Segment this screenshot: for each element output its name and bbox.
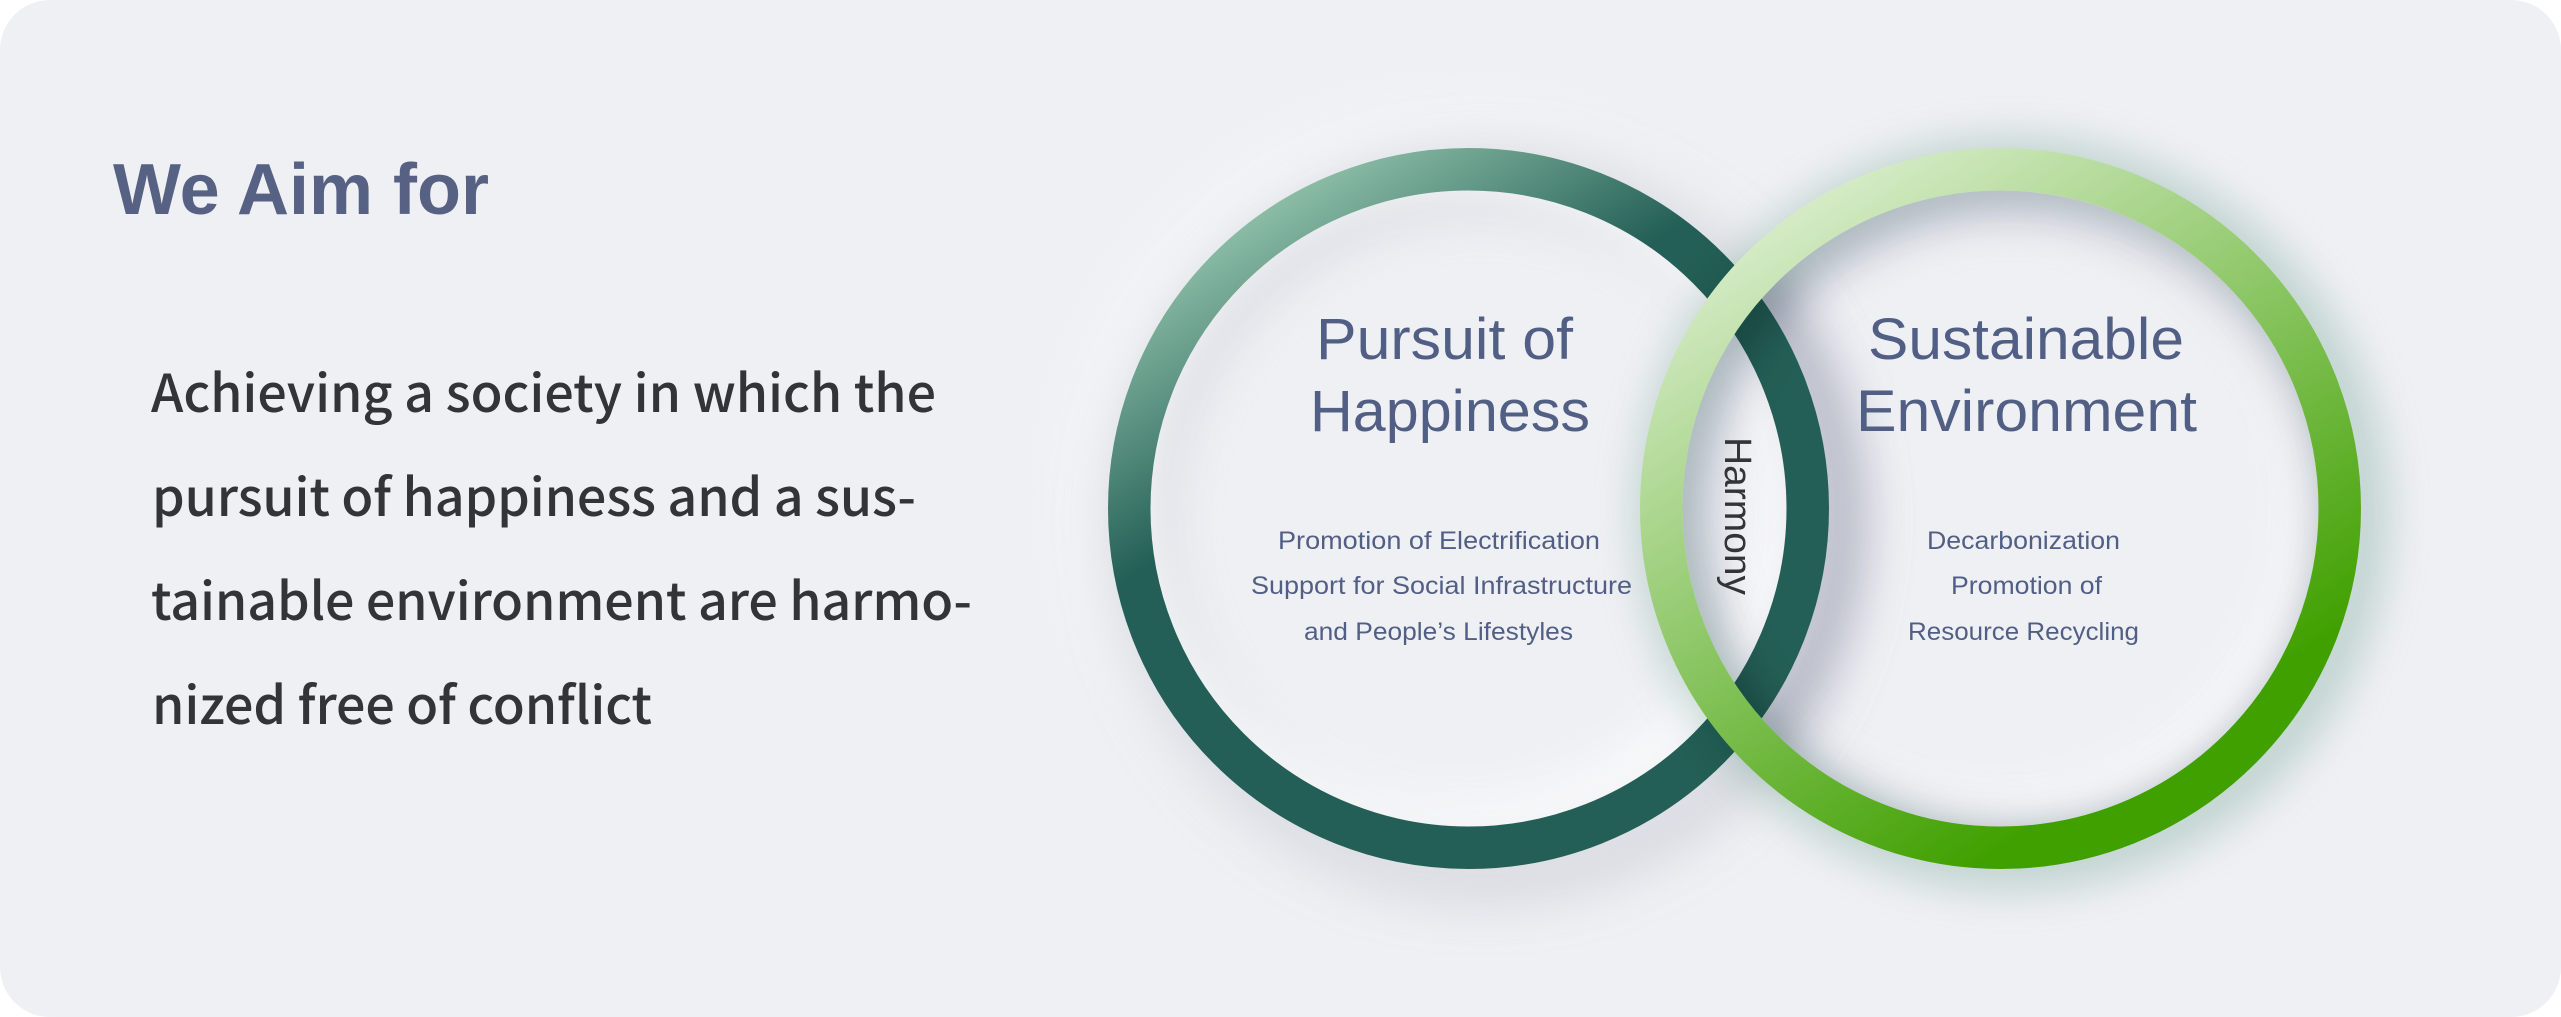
label: Sustainable Environment: Environment [1856, 379, 2197, 444]
list: happiness items [1251, 527, 1632, 646]
heading: We Aim for: We Aim for [113, 150, 489, 230]
label: Harmony: Harmony [1716, 437, 1758, 595]
label: Pursuit of Happiness [1310, 307, 1590, 444]
list: happiness items: and People’s Lifestyles [1304, 618, 1573, 646]
ring: pursuit of happiness [1102, 142, 2317, 874]
list: environment items: Resource Recycling [1908, 618, 2139, 646]
label: Pursuit of Happiness: Happiness [1310, 379, 1590, 444]
label: Sustainable Environment: Sustainable [1868, 307, 2184, 372]
list: environment items: Promotion of [1951, 572, 2102, 600]
list: happiness items: Promotion of Electrification [1278, 527, 1600, 555]
label: Pursuit of Happiness: Pursuit of [1316, 307, 1574, 372]
body text block [151, 352, 972, 739]
list: happiness items: Support for Social Infrastructure [1251, 572, 1632, 600]
body text block: Achieving a society in which the [151, 352, 936, 427]
body text block: pursuit of happiness and a sus- [152, 456, 916, 531]
list: environment items [1908, 527, 2139, 646]
body text block: tainable environment are harmo- [151, 560, 972, 635]
list: environment items: Decarbonization [1927, 527, 2120, 555]
ring: sustainable environment [1661, 164, 2362, 864]
venn diagram [1102, 142, 2362, 874]
body text block: nized free of conflict [152, 664, 652, 739]
label: Sustainable Environment [1856, 307, 2197, 444]
